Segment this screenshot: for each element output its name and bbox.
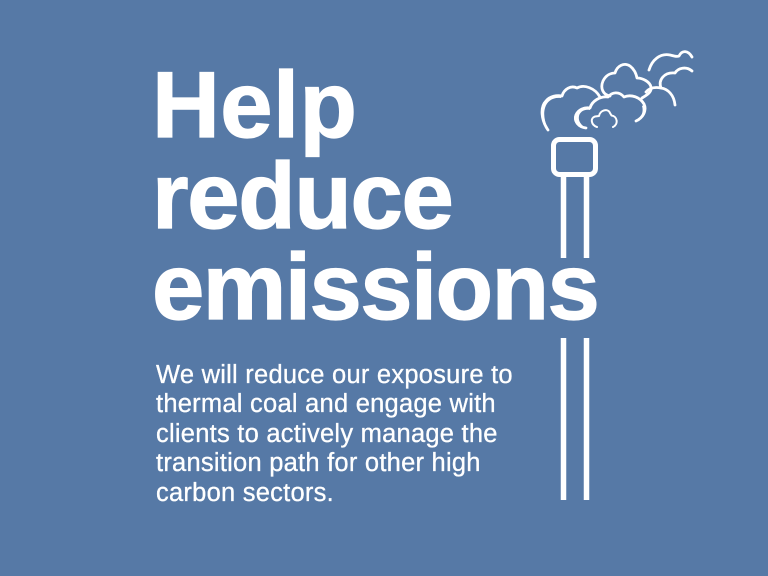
body text: thermal coal and engage with <box>156 390 496 418</box>
cloud thick crescents <box>541 95 646 130</box>
smoke clouds <box>542 52 692 130</box>
body text: We will reduce our exposure to <box>156 361 513 389</box>
body text <box>156 361 513 507</box>
chimney legs <box>564 175 586 500</box>
title <box>152 52 598 339</box>
chimney head <box>554 140 596 174</box>
text: Help <box>152 52 357 157</box>
text: emissions <box>152 234 598 339</box>
body text: clients to actively manage the <box>156 420 498 448</box>
text: reduce <box>152 143 452 248</box>
body text: transition path for other high <box>156 449 481 477</box>
body text: carbon sectors. <box>156 479 334 507</box>
